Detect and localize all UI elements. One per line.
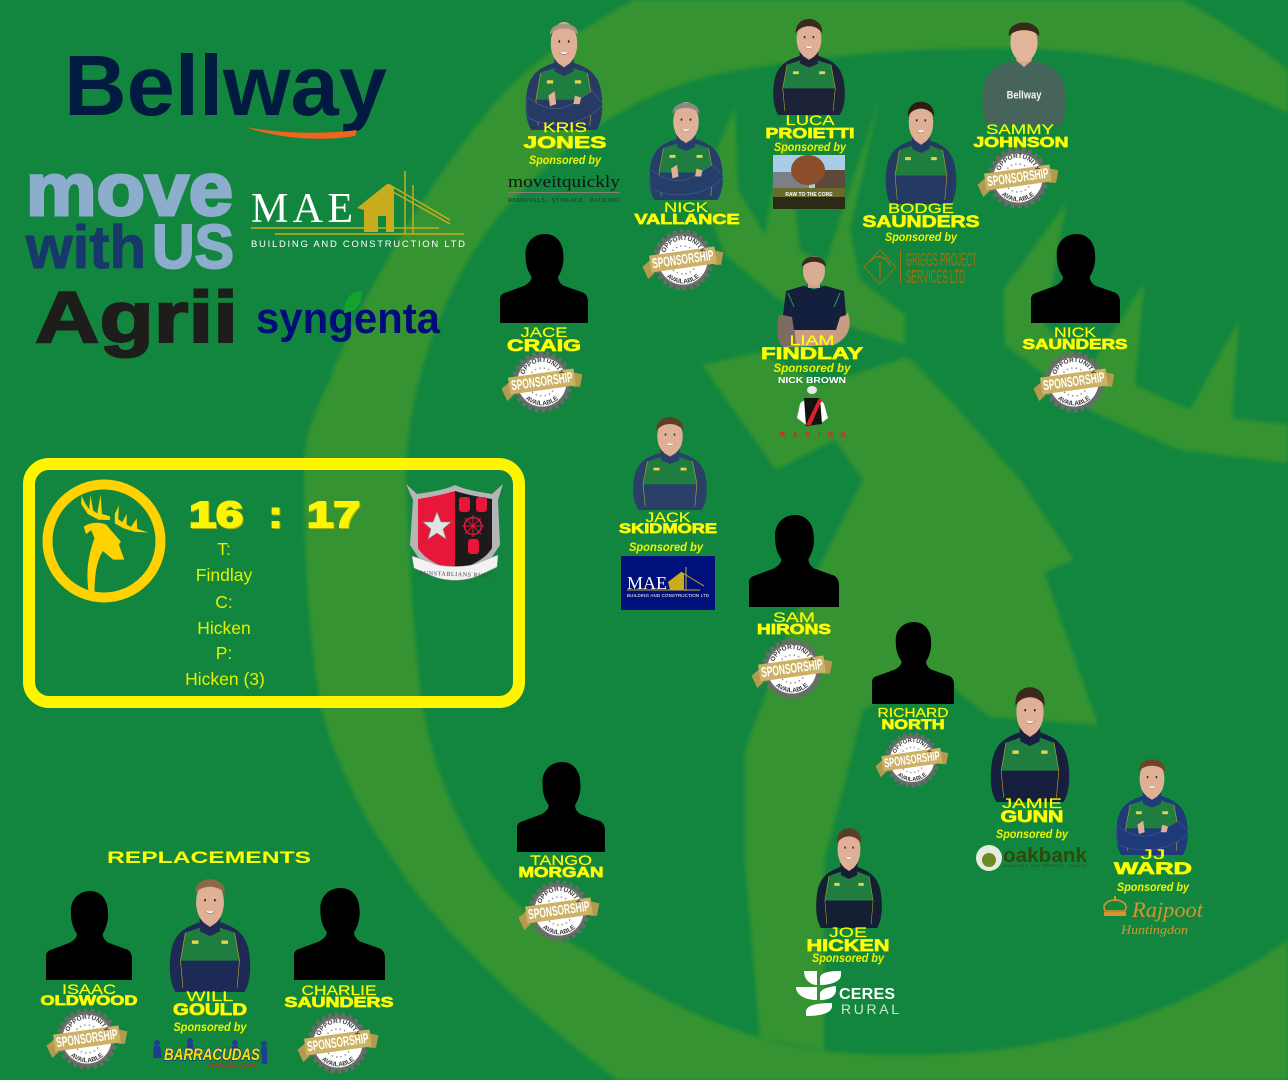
badge: sponsorship available: SPONSORSHIP xyxy=(510,369,574,393)
player: JJ Ward xyxy=(1104,759,1204,937)
name: SAM xyxy=(773,609,815,625)
name: ISAAC xyxy=(62,981,116,997)
badge: sponsorship available xyxy=(518,880,600,942)
badge: sponsorship available: OPPORTUNITY xyxy=(662,235,705,252)
name xyxy=(173,988,247,1019)
player: Luca Proietti xyxy=(766,19,854,209)
sponsor logo: Oakbank: oakbank xyxy=(1003,845,1088,867)
sponsor logo: Nick Brown Racing: NICK BROWN xyxy=(778,376,846,385)
sponsor logo: moveitquickly: REMOVALS · STORAGE · PACKING xyxy=(508,197,620,204)
icon: opposition crest xyxy=(406,484,503,580)
photo xyxy=(170,879,250,992)
name xyxy=(1000,795,1064,826)
badge: sponsorship available: AVAILABLE xyxy=(1058,396,1090,406)
name xyxy=(761,332,864,363)
name: OLDWOOD xyxy=(40,992,138,1008)
sponsor logo: Agrii: Agrii xyxy=(35,278,238,358)
badge: sponsorship available: OPPORTUNITY xyxy=(538,886,581,903)
name: JACK xyxy=(646,509,691,525)
name: JACE xyxy=(520,324,568,340)
silhouette xyxy=(749,515,839,607)
name xyxy=(507,324,581,355)
silhouette xyxy=(1031,234,1120,323)
sponsor logo: MAE on navy: MAE xyxy=(627,573,667,593)
badge: sponsorship available: AVAILABLE xyxy=(1002,192,1034,202)
name xyxy=(1114,846,1192,878)
name: SAMMY xyxy=(986,121,1055,137)
name xyxy=(862,200,980,231)
sponsor logo: Move With Us: US xyxy=(152,213,234,282)
scorers: Hicken xyxy=(197,618,251,638)
player: Sam Hirons xyxy=(749,515,839,700)
sponsor logo: moveitquickly xyxy=(508,172,621,204)
badge: sponsorship available: SPONSORSHIP xyxy=(55,1026,119,1050)
player: Sammy Johnson xyxy=(973,22,1068,208)
badge: sponsorship available: SPONSORSHIP xyxy=(306,1030,370,1054)
sponsor label: Sponsored by xyxy=(774,361,852,375)
sponsor logo: Move With Us: move xyxy=(26,148,233,231)
sponsor logo: Bellway: Bellway xyxy=(64,39,387,134)
sponsor photo: RAW TO THE CORE xyxy=(785,192,833,198)
sponsor logo: MAE Building and Construction xyxy=(251,171,465,250)
badge: sponsorship available: SPONSORSHIP xyxy=(1042,369,1106,393)
badge: sponsorship available xyxy=(752,638,832,700)
name xyxy=(524,119,606,152)
badge: sponsorship available: OPPORTUNITY xyxy=(892,738,932,753)
sponsor logo: Move With Us: with xyxy=(25,214,146,281)
sponsor logo: MAE Building and Construction: BUILDING AND CONSTRUCTION LTD xyxy=(251,239,465,250)
sponsor logo: Oakbank: CREATING THE PERFECT HABITAT xyxy=(1003,863,1088,868)
sponsor label: Sponsored by xyxy=(1117,880,1190,894)
sponsor logo: Barracudas: Activity Day Camps xyxy=(208,1062,258,1069)
sponsor logo: Syngenta: syngenta xyxy=(256,294,440,343)
name: SAUNDERS xyxy=(1022,336,1128,353)
score: 17 xyxy=(307,494,360,535)
scorers: T: xyxy=(217,539,231,559)
player: Liam Findlay xyxy=(761,256,864,439)
name: KRIS xyxy=(543,119,587,135)
heading: replacements: REPLACEMENTS xyxy=(107,848,311,867)
player: Will Gould xyxy=(153,879,267,1069)
name: PROIETTI xyxy=(766,125,854,142)
icon: opposition crest: DUNSTABLIANS RUFC xyxy=(419,571,491,579)
name: LIAM xyxy=(790,332,834,348)
name: SAUNDERS xyxy=(862,212,980,231)
name: RICHARD xyxy=(878,705,948,720)
sponsor label: Sponsored by xyxy=(885,230,958,244)
name: JOHNSON xyxy=(974,134,1068,151)
sponsor logo: MAE on navy xyxy=(621,556,715,610)
player: Bodge Saunders xyxy=(862,102,980,287)
sponsor label: Sponsored by xyxy=(174,1020,248,1034)
text: GRIGGS PROJECT xyxy=(906,250,977,270)
silhouette xyxy=(294,888,385,980)
sponsor label: Sponsored by xyxy=(629,540,704,554)
badge: sponsorship available: OPPORTUNITY xyxy=(66,1014,109,1031)
sponsor label: Sponsored by xyxy=(529,153,602,167)
scorers: P: xyxy=(216,643,232,663)
sponsor label: Sponsored by xyxy=(812,951,885,965)
name xyxy=(806,924,890,955)
panel: score box xyxy=(29,464,519,702)
name: NICK xyxy=(664,199,709,215)
name: TANGO xyxy=(530,852,592,868)
badge: sponsorship available: AVAILABLE xyxy=(542,924,576,934)
name: VALLANCE xyxy=(634,211,740,228)
photo xyxy=(1116,759,1188,855)
score: 16 xyxy=(189,494,243,535)
sponsor logo: moveitquickly: moveitquickly xyxy=(508,172,621,191)
name xyxy=(284,982,394,1011)
photo: Bellway xyxy=(1007,90,1042,102)
badge: sponsorship available: OPPORTUNITY xyxy=(316,1018,360,1035)
player: Nick Vallance xyxy=(634,102,740,290)
badge: sponsorship available: OPPORTUNITY xyxy=(770,644,814,661)
badge: sponsorship available: OPPORTUNITY xyxy=(1052,357,1096,374)
scorers xyxy=(185,539,265,689)
sponsor logo: Rajpoot Huntingdon: Huntingdon xyxy=(1120,922,1188,937)
badge: sponsorship available: AVAILABLE xyxy=(776,682,808,692)
name: JOE xyxy=(829,924,867,940)
badge: sponsorship available xyxy=(502,352,582,412)
sponsor logo: Barracudas xyxy=(153,1038,267,1069)
sponsor logo: Rajpoot Huntingdon: Rajpoot xyxy=(1131,897,1204,922)
photo xyxy=(991,687,1069,802)
badge: sponsorship available xyxy=(46,1008,128,1070)
sponsor label: Sponsored by xyxy=(996,827,1069,841)
sponsor logo: Nick Brown Racing xyxy=(778,376,847,439)
sponsor logo: Oakbank xyxy=(976,845,1088,871)
player: Kris Jones xyxy=(508,22,621,204)
photo xyxy=(773,19,845,115)
sponsor logo: Rajpoot Huntingdon xyxy=(1104,896,1204,937)
player: Jack Skidmore xyxy=(619,417,717,610)
name xyxy=(634,199,740,228)
silhouette xyxy=(500,234,588,323)
scorers: Findlay xyxy=(196,565,252,585)
name xyxy=(1022,324,1128,353)
name xyxy=(878,705,948,732)
name: JONES xyxy=(524,133,606,152)
sponsor logo: MAE on navy: BUILDING AND CONSTRUCTION LTD xyxy=(627,593,710,598)
badge: sponsorship available: AVAILABLE xyxy=(666,274,700,284)
score xyxy=(189,494,360,535)
name xyxy=(518,852,604,881)
player: Richard North xyxy=(872,622,954,788)
sponsor logo: Barracudas: BARRACUDAS xyxy=(164,1045,261,1064)
name: SAUNDERS xyxy=(284,994,394,1011)
badge: sponsorship available: SPONSORSHIP xyxy=(760,656,824,680)
photo xyxy=(526,22,603,130)
name xyxy=(757,609,831,638)
player: Joe Hicken xyxy=(796,828,899,1017)
player: Charlie Saunders xyxy=(284,888,394,1074)
badge: sponsorship available xyxy=(642,230,724,290)
player: Jace Craig xyxy=(500,234,588,412)
sponsor logo: Ceres Rural: RURAL xyxy=(841,1001,899,1017)
name: JAMIE xyxy=(1002,795,1062,811)
name: NICK xyxy=(1054,324,1097,340)
icon: home team stag crest xyxy=(48,484,160,598)
name: GUNN xyxy=(1000,807,1064,826)
name: CHARLIE xyxy=(302,982,376,998)
photo xyxy=(649,102,724,200)
badge: sponsorship available: OPPORTUNITY xyxy=(996,153,1040,170)
badge: sponsorship available: OPPORTUNITY xyxy=(520,357,564,374)
badge: sponsorship available xyxy=(298,1012,378,1074)
sponsor logo: Move With Us xyxy=(25,148,234,282)
badge: sponsorship available: AVAILABLE xyxy=(526,396,558,406)
photo xyxy=(816,828,882,928)
name xyxy=(619,509,717,536)
name: HIRONS xyxy=(757,621,831,638)
badge: sponsorship available: SPONSORSHIP xyxy=(986,165,1050,189)
badge: sponsorship available: SPONSORSHIP xyxy=(651,247,715,271)
name: FINDLAY xyxy=(761,344,864,363)
badge: sponsorship available: SPONSORSHIP xyxy=(883,749,941,770)
badge: sponsorship available xyxy=(876,732,948,788)
name: SKIDMORE xyxy=(619,520,717,536)
scorers: Hicken (3) xyxy=(185,669,265,689)
player: Isaac Oldwood xyxy=(40,891,138,1070)
name: NORTH xyxy=(882,716,944,732)
name xyxy=(40,981,138,1008)
sponsor logo: MAE Building and Construction: MAE xyxy=(251,186,353,232)
sponsor logo: Ceres Rural xyxy=(796,971,899,1017)
badge: sponsorship available xyxy=(1034,352,1114,412)
player: Tango Morgan xyxy=(517,762,605,942)
scorers: C: xyxy=(215,592,233,612)
badge: sponsorship available: AVAILABLE xyxy=(70,1052,104,1062)
silhouette xyxy=(872,622,954,704)
sponsor logo: Griggs Project Services: SERVICES LTD xyxy=(906,267,965,287)
score: : xyxy=(269,494,282,535)
name: GOULD xyxy=(173,1000,247,1019)
name: WARD xyxy=(1114,859,1192,878)
player: Nick Saunders xyxy=(1022,234,1128,412)
name: BODGE xyxy=(888,200,954,216)
badge: sponsorship available: AVAILABLE xyxy=(322,1056,354,1066)
sponsor logo: Nick Brown Racing: RACING xyxy=(780,432,847,439)
name xyxy=(974,121,1068,151)
name: CRAIG xyxy=(507,336,581,355)
silhouette xyxy=(517,762,605,852)
name: HICKEN xyxy=(806,936,890,955)
name: WILL xyxy=(186,988,234,1004)
name: MORGAN xyxy=(518,864,604,881)
photo xyxy=(886,102,956,204)
silhouette xyxy=(46,891,132,980)
badge: sponsorship available: AVAILABLE xyxy=(897,772,927,782)
sponsor logo: Ceres Rural: CERES xyxy=(839,986,895,1003)
player: Jamie Gunn xyxy=(976,687,1088,871)
sponsor logo: Griggs Project Services xyxy=(864,250,977,287)
photo xyxy=(982,22,1066,126)
sponsor label: Sponsored by xyxy=(774,140,847,154)
photo xyxy=(778,256,850,347)
name: LUCA xyxy=(786,112,835,128)
name xyxy=(766,112,854,142)
photo xyxy=(633,417,707,510)
sponsor photo xyxy=(773,155,845,209)
name: JJ xyxy=(1140,846,1166,862)
badge: sponsorship available: SPONSORSHIP xyxy=(527,898,591,922)
badge: sponsorship available xyxy=(978,148,1058,208)
